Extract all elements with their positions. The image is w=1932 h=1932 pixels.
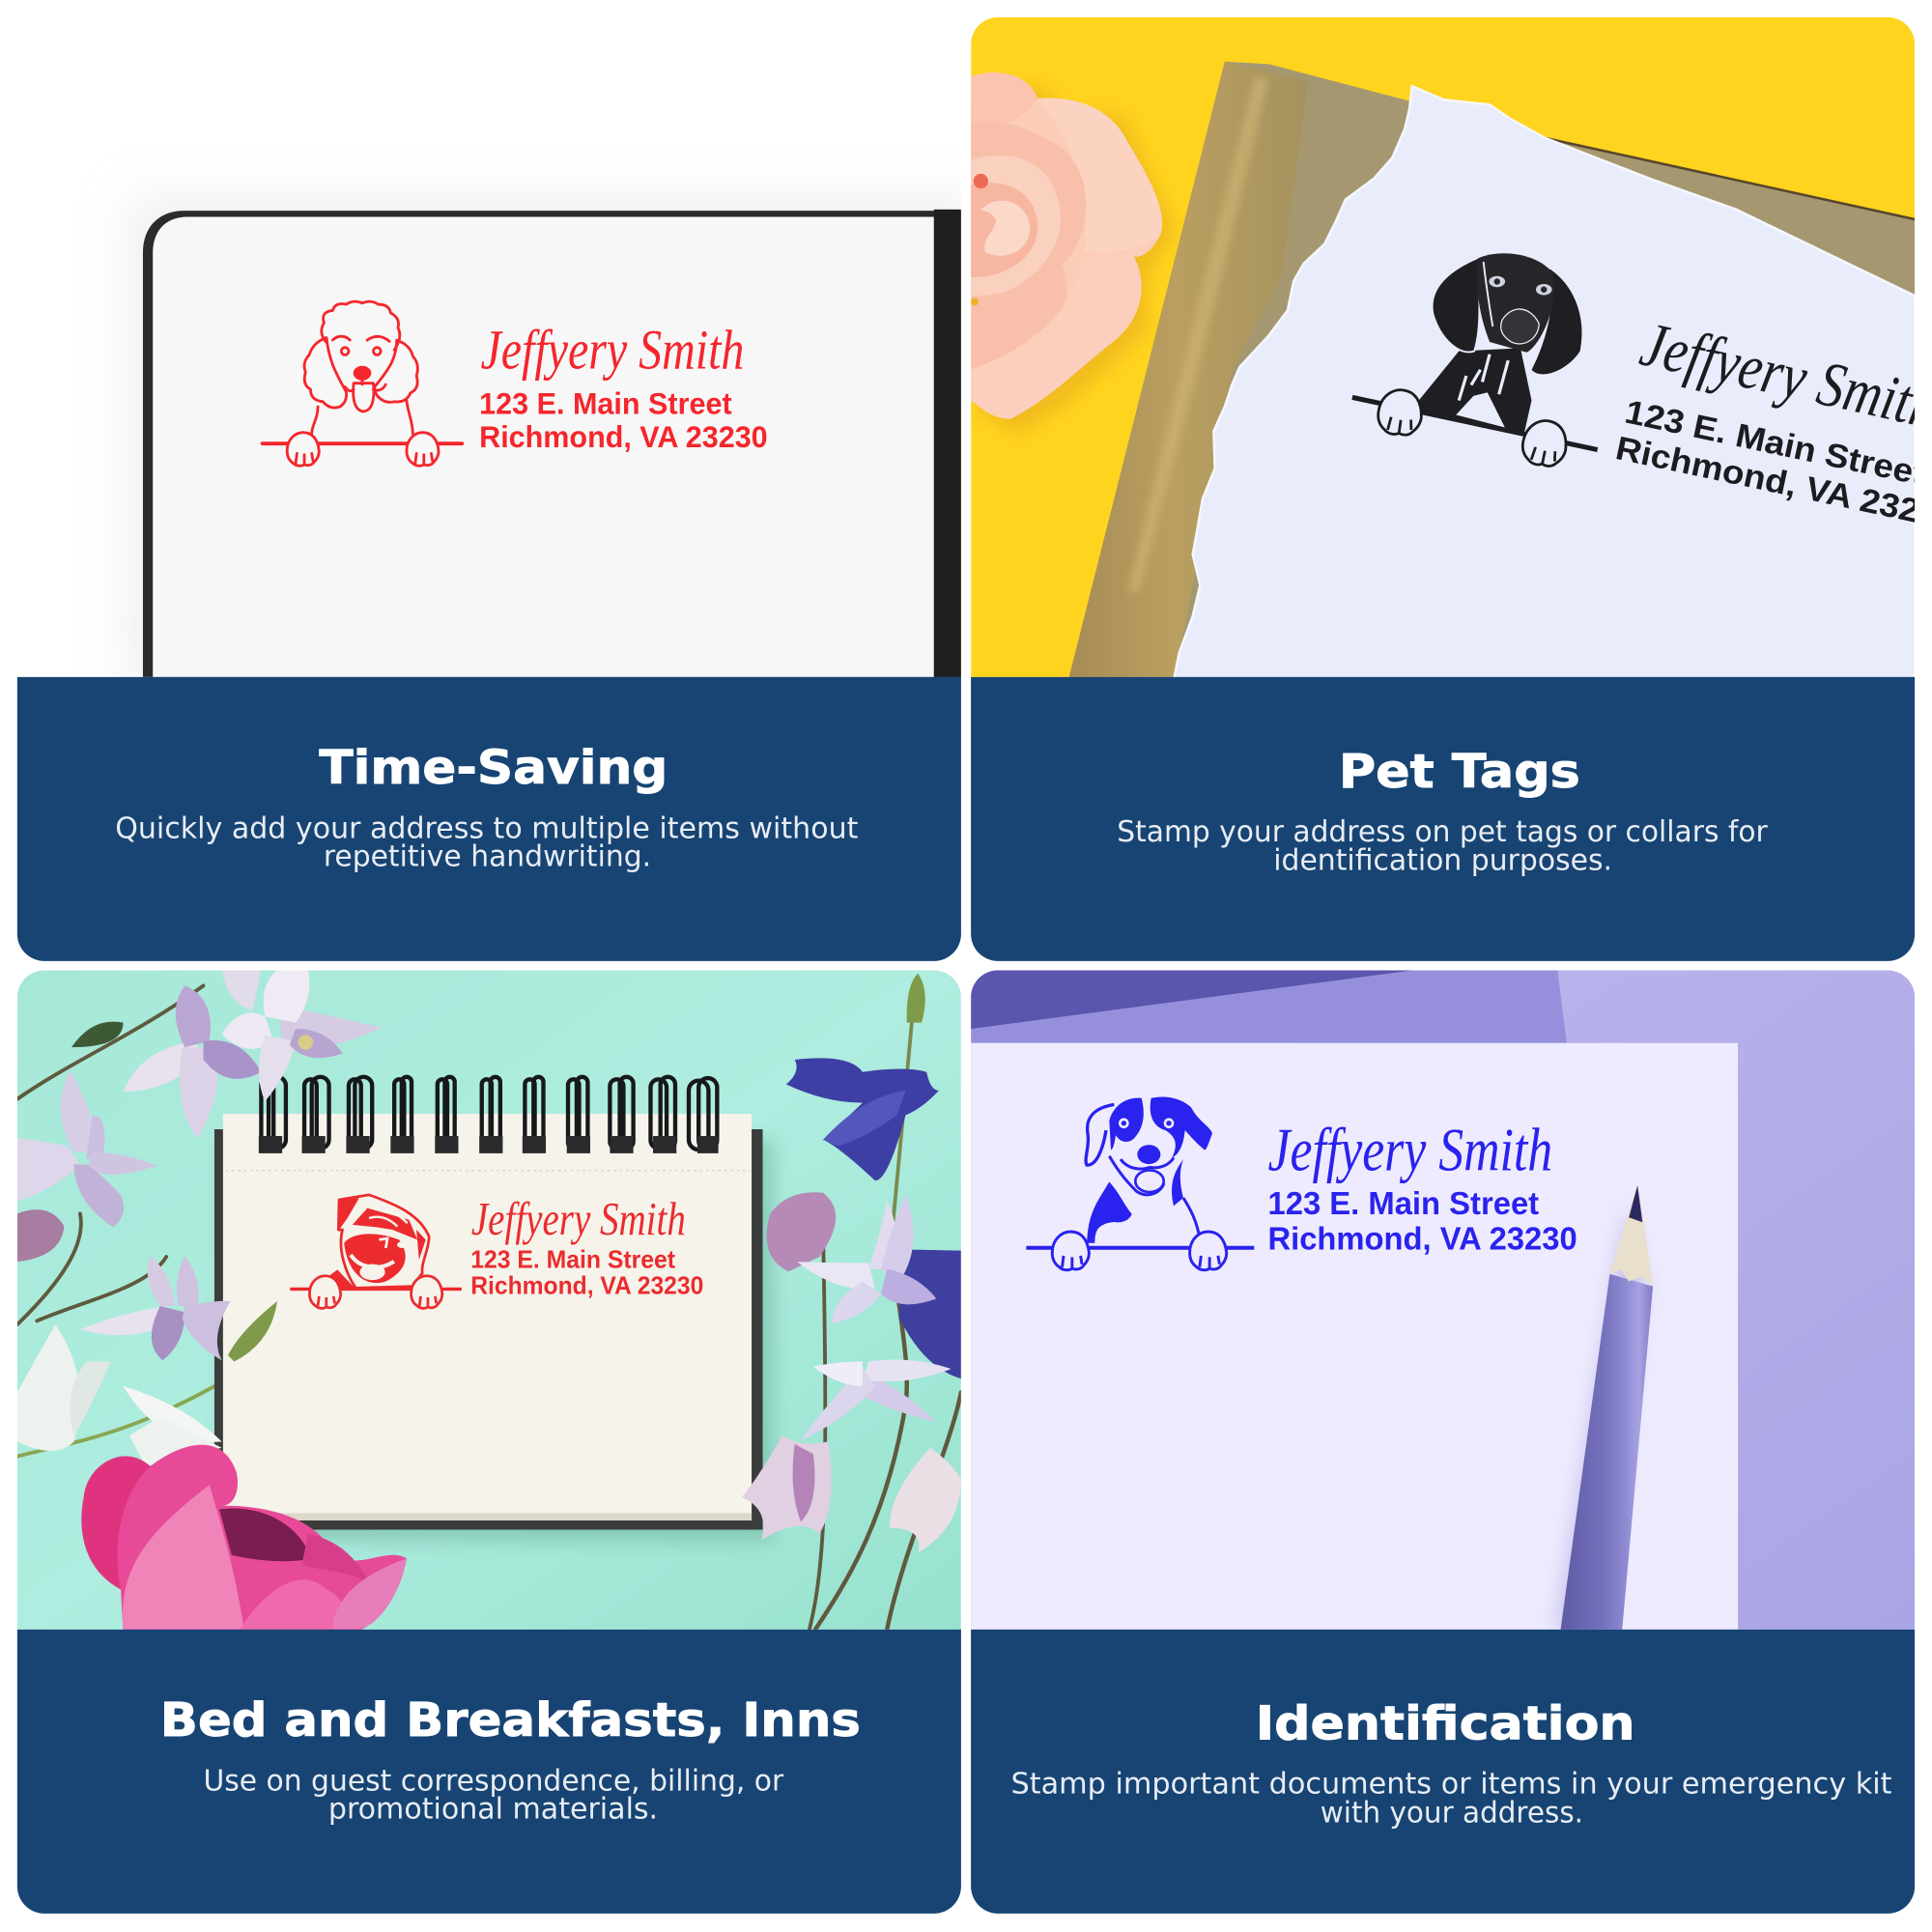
panel: Time-Saving: [17, 17, 980, 961]
description: [115, 811, 858, 874]
spiral rings: [259, 1077, 719, 1153]
caption block: [17, 1630, 961, 1914]
photo: spiral notebook and flowers on teal: [17, 970, 961, 1633]
flower: pink peony: [81, 1445, 407, 1633]
stamp: poodle: [263, 301, 462, 466]
panel: Bed and Breakfasts, Inns: [17, 970, 961, 1914]
photo: notebook on white: [129, 199, 961, 677]
heading: Time-Saving: [319, 741, 668, 795]
stamp: address text: 123 E. Main Street: [1267, 1186, 1539, 1222]
stamp: address text: Richmond, VA 23230: [1612, 430, 1932, 538]
description: identification purposes.: [1273, 844, 1612, 878]
pencil: [1560, 1185, 1653, 1631]
heading: Identification: [1256, 1696, 1635, 1750]
stamp: address text: 123 E. Main Street: [1622, 394, 1929, 494]
flowers: bottom right: [742, 1435, 961, 1552]
caption block: [971, 677, 1915, 961]
heading: Pet Tags: [1339, 745, 1580, 799]
panel: Pet Tags: [971, 17, 1932, 961]
flowers: left lavender: [17, 1070, 156, 1262]
notebook: [214, 1114, 773, 1540]
purple sheets: [971, 970, 1567, 1043]
stamp: address text: Jeffyery Smith: [480, 318, 744, 381]
description: Stamp your address on pet tags or collars for: [1117, 815, 1768, 849]
stamp: hound: [1352, 253, 1598, 469]
stamp: dog: [1026, 1096, 1254, 1270]
flowers: right lavender and blue: [767, 1192, 961, 1440]
stamp: address text: [1267, 1116, 1577, 1257]
description: Use on guest correspondence, billing, or: [203, 1764, 784, 1798]
flowers: top left columbines: [71, 970, 382, 1139]
stamp: address text: [481, 328, 767, 452]
heading: Bed and Breakfasts, Inns: [160, 1693, 861, 1747]
description: Stamp important documents or items in your emergency kit: [1011, 1768, 1892, 1802]
description: Quickly add your address to multiple items without: [115, 811, 858, 845]
description: promotional materials.: [328, 1793, 658, 1827]
caption block: [17, 677, 961, 961]
description: [1117, 815, 1768, 878]
description: [1011, 1768, 1892, 1830]
pencil shadow: [1555, 1202, 1645, 1629]
stamp: address text: [1616, 325, 1915, 523]
description: repetitive handwriting.: [324, 840, 651, 874]
description: [203, 1764, 784, 1827]
torn white paper: [1172, 86, 1915, 690]
photo: paper and pencil on lilac: [971, 970, 1915, 1631]
stamp: address text: Jeffyery Smith: [471, 1194, 686, 1245]
flowers: white left: [17, 1324, 222, 1466]
description: with your address.: [1321, 1796, 1583, 1830]
stamp: address text: [470, 1194, 703, 1299]
stamp: pug: [290, 1195, 462, 1308]
stamp: address text: Jeffyery Smith: [1267, 1116, 1552, 1184]
caption block: [971, 1630, 1915, 1914]
stamp: address text: 123 E. Main Street: [470, 1246, 675, 1273]
flower: blue columbine: [786, 1058, 939, 1180]
stems: [17, 985, 961, 1629]
cardboard: [1065, 62, 1915, 690]
stamp: address text: 123 E. Main Street: [479, 387, 732, 421]
stamp: address text: Richmond, VA 23230: [1267, 1221, 1577, 1257]
stamp: address text: Richmond, VA 23230: [470, 1272, 703, 1299]
flowers: mid left: [80, 1256, 277, 1361]
white paper sheet: [971, 1043, 1738, 1631]
rose: [971, 72, 1176, 435]
photo: torn paper on yellow: [971, 17, 1932, 690]
bud: green top right: [907, 974, 925, 1023]
panel: Identification: [971, 970, 1915, 1914]
stamp: address text: Richmond, VA 23230: [479, 420, 768, 454]
